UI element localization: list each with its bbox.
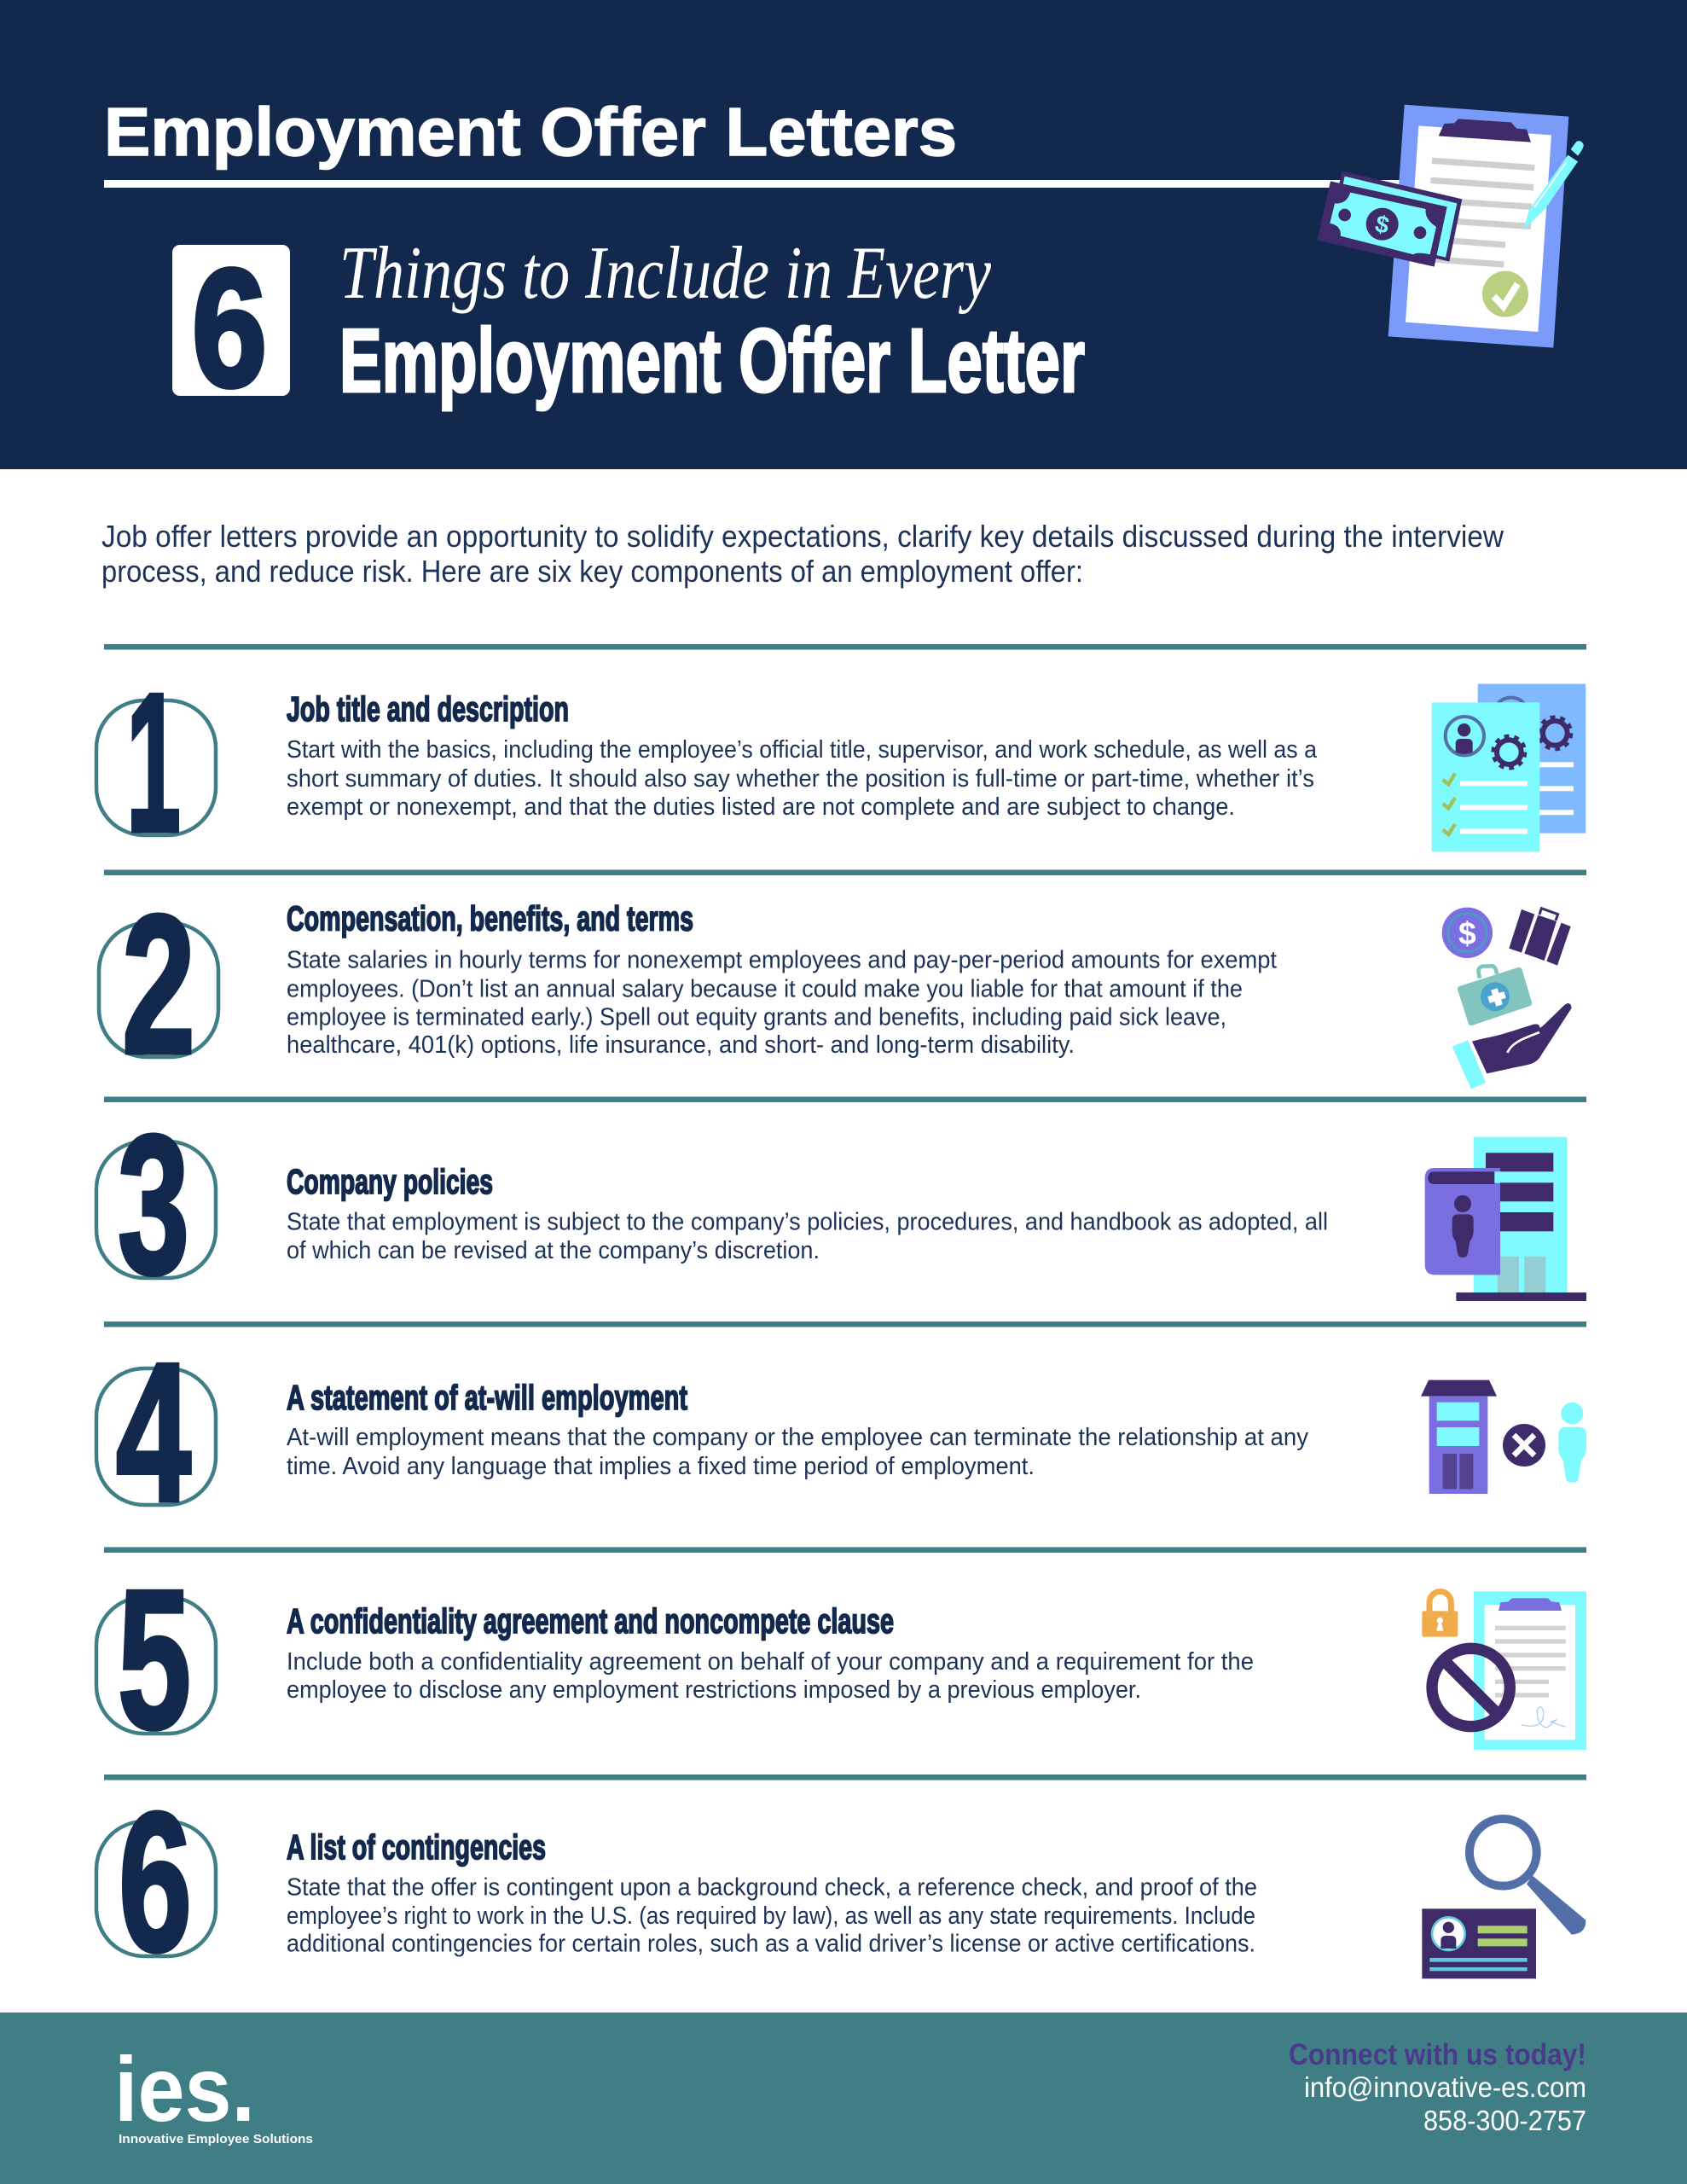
- heading 4: A statement of at-will employment: [287, 1378, 687, 1417]
- body text 1: exempt or nonexempt, and that the duties listed are not complete and are subject to change.: [287, 793, 1235, 821]
- footer band: [0, 2013, 1687, 2184]
- body text 5: [287, 1648, 1254, 1704]
- body text 3: State that employment is subject to the company’s policies, procedures, and handbook as adopted, all: [287, 1208, 1328, 1235]
- body text 3: of which can be revised at the company’s discretion.: [287, 1237, 820, 1264]
- icon: clipboard with money and pen: $: [1372, 210, 1392, 239]
- body text 1: Start with the basics, including the employee’s official title, supervisor, and work schedule, as well as a: [287, 736, 1317, 764]
- contact details: 858-300-2757: [1423, 2105, 1586, 2136]
- contact details: [1289, 2038, 1586, 2136]
- panel: item 5 confidentiality: [96, 1549, 1586, 1770]
- intro paragraph: [101, 519, 1504, 589]
- icon: benefits hand: [1442, 908, 1572, 1089]
- subtitle script line: Things to Include in Every: [339, 232, 992, 315]
- number 2: 2: [122, 874, 195, 1095]
- icon: job description documents: [1432, 684, 1586, 851]
- number 6: 6: [119, 1772, 192, 1993]
- number frame 1: [96, 700, 216, 835]
- number frame 2: [99, 923, 218, 1057]
- panel: item 1 job title: 1: [126, 653, 181, 874]
- body text 2: employee is terminated early.) Spell out equity grants and benefits, including paid sick leave,: [287, 1003, 1226, 1031]
- header banner: [0, 0, 1687, 469]
- heading 1: Job title and description: [287, 689, 569, 729]
- body text 6: [287, 1873, 1257, 1957]
- icon: building and handbook: [1425, 1137, 1586, 1301]
- number frame 6: [96, 1821, 216, 1956]
- icon: company separate from employee: [1421, 1380, 1586, 1494]
- body text 3: [287, 1208, 1328, 1264]
- number frame 5: [96, 1597, 216, 1734]
- heading 5: A confidentiality agreement and noncompete clause: [287, 1601, 894, 1641]
- title: Employment Offer Letters: [104, 94, 957, 170]
- body text 5: Include both a confidentiality agreement on behalf of your company and a requirement for the: [287, 1648, 1254, 1676]
- body text 4: At-will employment means that the company or the employee can terminate the relationship at any: [287, 1424, 1309, 1451]
- panel: item 3 company policies: [96, 1095, 1586, 1316]
- logo: ies.: [114, 2037, 255, 2140]
- panel: item 6 contingencies: [96, 1772, 1586, 1993]
- body text 1: [287, 736, 1317, 821]
- subtitle bold line: Employment Offer Letter: [339, 311, 1085, 411]
- panel: item 2 compensation: [99, 874, 1572, 1095]
- body text 2: healthcare, 401(k) options, life insurance, and short- and long-term disability.: [287, 1031, 1075, 1059]
- panel: item 4 at-will employment: [96, 1322, 1586, 1543]
- intro paragraph: process, and reduce risk. Here are six key components of an employment offer:: [101, 554, 1083, 589]
- heading 2: Compensation, benefits, and terms: [287, 899, 693, 938]
- body text 1: short summary of duties. It should also say whether the position is full-time or part-time, whether it’s: [287, 765, 1314, 793]
- intro paragraph: Job offer letters provide an opportunity to solidify expectations, clarify key details discussed during the interview: [101, 519, 1504, 554]
- icon: magnifier and id card: [1422, 1819, 1586, 1978]
- number 3: 3: [118, 1095, 189, 1316]
- number 4: 4: [116, 1322, 191, 1543]
- body text 2: employees. (Don’t list an annual salary because it could make you liable for that amount if the: [287, 976, 1243, 1003]
- icon: clipboard lock prohibited: [1422, 1591, 1586, 1750]
- icon: clipboard with money and pen: [1317, 105, 1584, 348]
- number 5: 5: [118, 1549, 191, 1770]
- contact details: info@innovative-es.com: [1304, 2071, 1586, 2103]
- number badge: 6: [192, 235, 267, 421]
- body text 2: [287, 947, 1277, 1059]
- body text 6: employee’s right to work in the U.S. (as required by law), as well as any state requirements. Include: [287, 1902, 1255, 1930]
- contact details: Connect with us today!: [1289, 2038, 1586, 2071]
- body text 6: additional contingencies for certain roles, such as a valid driver’s license or active certifications.: [287, 1930, 1255, 1957]
- number frame 3: [96, 1141, 216, 1278]
- body text 6: State that the offer is contingent upon a background check, a reference check, and proof of the: [287, 1873, 1257, 1901]
- body text 4: time. Avoid any language that implies a fixed time period of employment.: [287, 1453, 1035, 1480]
- logo: Innovative Employee Solutions: [119, 2132, 313, 2146]
- body text 2: State salaries in hourly terms for nonexempt employees and pay-per-period amounts for exempt: [287, 947, 1277, 974]
- number frame 4: [96, 1368, 216, 1505]
- icon: benefits hand: $: [1458, 915, 1476, 951]
- heading 6: A list of contingencies: [287, 1827, 546, 1867]
- panel: item 1 job title: [96, 653, 1586, 874]
- heading 3: Company policies: [287, 1162, 493, 1201]
- body text 4: [287, 1424, 1309, 1480]
- body text 5: employee to disclose any employment restrictions imposed by a previous employer.: [287, 1676, 1141, 1704]
